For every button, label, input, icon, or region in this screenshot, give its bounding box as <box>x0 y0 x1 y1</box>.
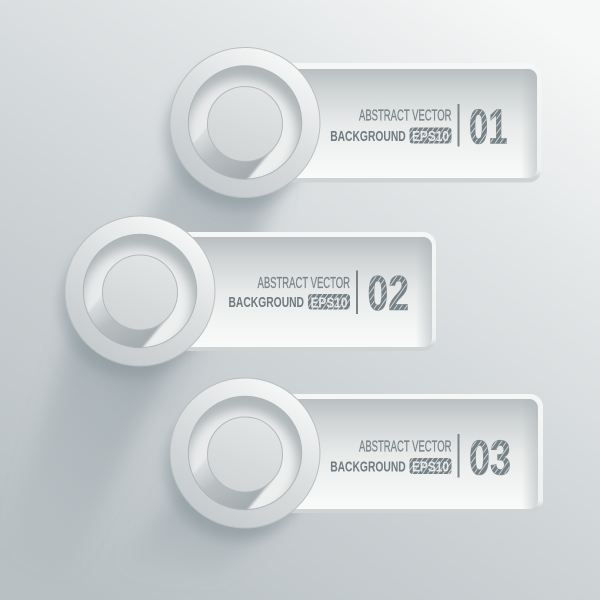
number 3: 03 <box>469 432 511 486</box>
divider 2 <box>356 270 358 314</box>
divider 3 <box>458 434 460 478</box>
row 1 <box>163 48 542 202</box>
circle button 2 <box>58 216 215 370</box>
label 1 <box>330 108 452 145</box>
label 3 <box>330 439 452 476</box>
circle button 3 <box>163 378 320 532</box>
label 1: EPS10 <box>412 128 449 145</box>
row 3 <box>163 378 543 532</box>
label 1: BACKGROUND <box>330 128 406 145</box>
label 2: ABSTRACT VECTOR <box>258 275 350 292</box>
row 2 <box>58 216 436 370</box>
number 1: 01 <box>469 100 508 154</box>
label 2: BACKGROUND <box>228 294 304 311</box>
label 2 <box>228 275 350 312</box>
panel 1 <box>270 63 542 182</box>
panel 3 <box>270 394 543 513</box>
label 2: EPS10 <box>310 294 348 312</box>
panel 2 <box>165 232 436 351</box>
label 3: BACKGROUND <box>330 458 406 476</box>
circle button 1 <box>163 48 320 202</box>
divider 1 <box>458 104 460 146</box>
label 3: ABSTRACT VECTOR <box>359 439 452 456</box>
label 3: EPS10 <box>412 458 449 476</box>
number 2: 02 <box>368 267 409 321</box>
label 1: ABSTRACT VECTOR <box>359 108 452 124</box>
long shadows <box>0 63 311 575</box>
